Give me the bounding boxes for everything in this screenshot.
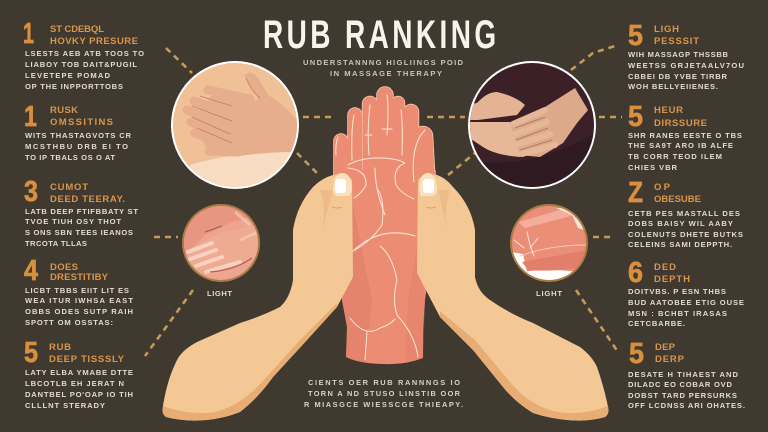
right item 2: [628, 101, 742, 172]
left hand: [162, 174, 353, 421]
right item 5: DOBST TARD PERSURKS: [628, 391, 737, 400]
left item 4: DRESTITIBY: [50, 272, 109, 283]
caption: R MIASGCE WIESSCGE THIEAPY.: [304, 400, 463, 409]
right item 4: CETCBARBE.: [628, 319, 685, 328]
right item 5: DILADC EO COBAR OVD: [628, 380, 733, 389]
left item 5: DANTBEL PO'OAP IO TIH: [25, 390, 133, 399]
photo circle: light touch, left: [182, 204, 260, 282]
title: RUB RANKING: [263, 13, 496, 57]
right item 2: TB CORR TEOD ILEM: [628, 152, 722, 161]
right item 2: HEUR: [654, 105, 683, 116]
left item 3: LATB DEEP FTIFBBATY ST: [25, 207, 138, 216]
left item 2: RUSK: [50, 105, 78, 116]
right item 4: DEPTH: [654, 274, 690, 285]
left item 4: SPOTT OM OSSTAS:: [25, 318, 113, 327]
left item 3: CUMOT: [50, 182, 88, 193]
left item 4: [24, 255, 133, 327]
left item 2: WITS THASTAGVOTS CR: [25, 131, 132, 140]
left item 5: 5: [24, 337, 38, 369]
photo circle: hand on back, top left: [170, 60, 300, 190]
right item 5: OFF LCDNSS ARI OHATES.: [628, 401, 745, 410]
right item 2: CHIES VBR: [628, 163, 678, 172]
photo circle: muscle texture, right: [510, 204, 590, 285]
right item 3: COLENUTS DHETE BUTKS: [628, 230, 743, 239]
right thumbnail: [419, 173, 437, 196]
right item 3: CELEINS SAMI DEPPTH.: [628, 240, 732, 249]
left item 2: MCSTHBU DRB EI TO: [25, 142, 128, 151]
right item 1: [628, 20, 745, 91]
left item 1: HOVKY PRESURE: [50, 36, 138, 47]
right item 5: DESATE H TIHAEST AND: [628, 370, 739, 379]
connector dashes: [145, 46, 622, 356]
right item 2: SHR RANES EESTE O TBS: [628, 131, 742, 140]
right item 3: DOBS BAISY WIL AABY: [628, 219, 733, 228]
right item 2: DIRSSURE: [654, 118, 707, 129]
palm with fingers: [335, 95, 436, 364]
right item 3: OP: [654, 182, 671, 193]
left item 4: WEA ITUR IWHSA EAST: [25, 296, 133, 305]
left item 3: DEED TEERAY.: [50, 194, 125, 205]
left item 1: OP THE INPPORTTOBS: [25, 82, 123, 91]
right item 2: THE SA9T ARO IB ALFE: [628, 141, 733, 150]
subtitle: UNDERSTANNNG HIGLIINGS POID: [303, 58, 464, 67]
left item 1: LSESTS AEB ATB TOOS TO: [25, 49, 144, 58]
right item 5: 5: [629, 338, 644, 370]
photo circle: interlaced hands, top right: [465, 60, 600, 190]
left item 2: 1: [24, 101, 37, 133]
left item 5: LATY ELBA YMABE DTTE: [25, 368, 133, 377]
right item 1: 5: [628, 20, 643, 52]
left item 5: CLLLNT STERADY: [25, 401, 105, 410]
right item 5: DEP: [655, 342, 676, 353]
right item 4: [628, 257, 744, 328]
left item 3: [24, 176, 138, 248]
left item 5: RUB: [49, 342, 71, 353]
right item 4: BUD AATOBEE ETIG OUSE: [628, 298, 744, 307]
caption: [304, 378, 463, 409]
left item 1: [23, 18, 144, 91]
right item 3: OBESUBE: [654, 194, 701, 205]
left item 2: TO IP TBALS OS O AT: [25, 153, 115, 162]
palm shading: [342, 200, 372, 362]
subtitle: IN MASSAGE THERAPY: [330, 69, 442, 78]
left item 4: DOES: [50, 262, 78, 273]
right item 3: CETB PES MASTALL DES: [628, 209, 740, 218]
left item 4: LICBT TBBS EIIT LIT ES: [25, 286, 129, 295]
left item 5: DEEP TISSSLY: [49, 354, 125, 365]
left item 2: [24, 101, 132, 162]
right item 1: WEETSS GRJETAALV7OU: [628, 61, 745, 70]
caption: CIENTS OER RUB RANNNGS IO: [308, 378, 460, 387]
left item 3: TVOE TIUH OSY THOT: [25, 217, 121, 226]
left item 4: 4: [24, 255, 38, 287]
right item 5: [628, 338, 745, 410]
right item 1: WOH BELLYEIIENES.: [628, 82, 718, 91]
palm crease lines: [336, 95, 425, 360]
right item 1: WIH MASSAGP THSSBB: [628, 50, 729, 59]
right item 1: PESSSIT: [654, 36, 699, 47]
left item 3: TRCOTA TLLAS: [25, 239, 87, 248]
left item 4: OBBS ODES SUTP RAIH: [25, 307, 133, 316]
label: light, left: LIGHT: [207, 289, 232, 298]
right item 5: DERP: [655, 354, 685, 365]
label: light, right: LIGHT: [536, 289, 562, 298]
left item 5: LBCOTLB EH JERAT N: [25, 379, 124, 388]
left item 1: ST CDEBQL: [50, 24, 104, 35]
left item 3: 3: [24, 176, 38, 208]
right item 4: 6: [628, 257, 643, 289]
right item 4: MSN : BCHBT IRASAS: [628, 309, 727, 318]
left item 5: [24, 337, 133, 410]
left item 3: S ONS SBN TEES IEANOS: [25, 228, 133, 237]
subtitle: [303, 58, 464, 78]
left item 1: LEVETEPE POMAD: [25, 71, 111, 80]
right item 1: LIGH: [654, 24, 679, 35]
right item 1: CBBEI DB YVBE TIRBR: [628, 72, 728, 81]
right item 3: Z: [628, 177, 643, 209]
left thumbnail: [333, 173, 352, 196]
left item 1: LIABOY TOB DAIT&PUGIL: [25, 60, 137, 69]
right item 4: DED: [654, 262, 676, 273]
right hand: [417, 174, 609, 421]
left item 1: 1: [23, 18, 34, 50]
right item 2: 5: [628, 101, 643, 133]
left item 2: OMSSITINS: [50, 117, 113, 128]
right item 4: DOITVBS. P ESN THBS: [628, 287, 726, 296]
illustration: palm between two hands: [162, 95, 609, 421]
right item 3: [628, 177, 743, 249]
caption: TORN A ND STUSO LINSTIB OOR: [308, 389, 461, 398]
